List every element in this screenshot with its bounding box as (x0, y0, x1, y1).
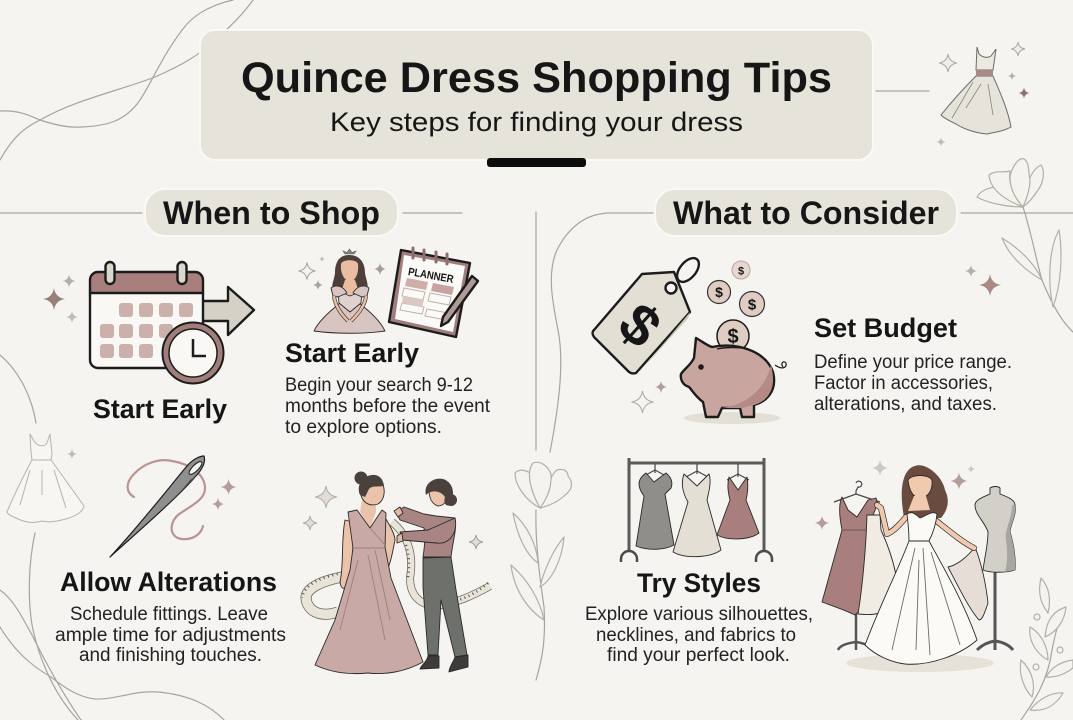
heading: allow alterations: Allow Alterations (60, 567, 277, 597)
panel: try styles (585, 458, 1015, 672)
text: start early description: to explore options. (285, 417, 442, 438)
icon: piggy bank: $ (727, 326, 739, 348)
illustration: bride (865, 465, 988, 664)
icon: clock (162, 322, 224, 384)
illustration: floor shadow (846, 654, 994, 672)
icon: thread (128, 460, 205, 539)
decorative branch: bottom right (1020, 578, 1073, 720)
text: allow alterations description: and finishing touches. (79, 645, 262, 666)
text: allow alterations description: ample time for adjustments (55, 625, 286, 646)
icon: falling coins: $ (748, 296, 757, 314)
icon: falling coins: $ (715, 284, 723, 300)
text: try styles description: Explore various silhouettes, (585, 604, 813, 625)
connector line: title to dress (876, 90, 929, 92)
sparkles: bride (815, 460, 975, 530)
text: allow alterations description (55, 604, 286, 666)
dress: cream (673, 474, 721, 557)
subtitle: Key steps for finding your dress (330, 107, 743, 137)
icon: dress, top right (941, 47, 1011, 134)
text: try styles description: find your perfect look. (607, 645, 790, 666)
text: set budget description: alterations, and taxes. (814, 394, 997, 415)
sparkles: top right flower (965, 265, 1001, 296)
text: start early description (285, 375, 491, 438)
section heading: When to Shop (145, 189, 398, 236)
illustration: hanging rose dress on stand (822, 481, 896, 650)
heading: start early: Start Early (93, 394, 227, 424)
text: set budget description (814, 352, 1012, 415)
title accent bar (487, 158, 586, 167)
illustration: mannequin (975, 486, 1015, 650)
section heading: What to Consider: What to Consider (673, 195, 939, 231)
heading: start early: Start Early (285, 338, 419, 368)
panel: start early calendar (43, 262, 254, 424)
icon: clothing rack (621, 458, 772, 562)
decorative dress outline: left (7, 434, 84, 522)
sparkles: top right dress (936, 42, 1030, 146)
text: set budget description: Factor in accessories, (814, 373, 993, 394)
text: start early description: months before the event (285, 396, 491, 417)
decorative flower: top right (977, 159, 1073, 332)
sparkles: calendar (43, 274, 78, 323)
text: start early description: Begin your search 9-12 (285, 375, 473, 396)
illustration: planner (389, 248, 478, 337)
title panel (200, 30, 873, 167)
heading: try styles: Try Styles (637, 568, 761, 598)
icon: calendar (90, 262, 203, 368)
section heading: What to Consider (655, 189, 957, 236)
section lines: when to shop (0, 212, 462, 214)
decorative swirls: top left (0, 0, 253, 160)
planner label: PLANNER (407, 266, 455, 286)
dress: grey (636, 473, 674, 549)
heading: set budget: Set Budget (814, 313, 957, 343)
sparkles: fitting (303, 486, 483, 549)
dollar sign: $ (606, 290, 673, 360)
panel: allow alterations (55, 456, 490, 674)
section line: what to consider (961, 212, 1073, 214)
text: allow alterations description: Schedule fittings. Leave (70, 604, 268, 625)
decorative flower: centre (511, 212, 653, 680)
panel: set budget (592, 254, 1012, 424)
icon: price tag (592, 254, 703, 374)
text: try styles description (585, 604, 813, 666)
text: try styles description: necklines, and fabrics to (596, 625, 796, 646)
icon: falling coins: $ (738, 266, 744, 278)
sparkles: budget (632, 381, 667, 413)
illustration: seamstress (394, 479, 468, 672)
icon: arrow (200, 287, 254, 335)
illustration: measuring tape (302, 522, 490, 614)
illustration: princess (314, 249, 385, 333)
icon: needle (110, 456, 205, 557)
sparkles: princess (298, 256, 386, 290)
sparkles: needle (212, 479, 236, 510)
dress: rose (717, 477, 759, 539)
section heading: When to Shop: When to Shop (163, 195, 380, 231)
sparkle: left dress (67, 449, 77, 459)
illustration: woman in gown (315, 472, 423, 674)
panel: start early planner (285, 248, 491, 438)
text: set budget description: Define your price range. (814, 352, 1012, 373)
decorative swirls: bottom left (0, 355, 226, 720)
title: Quince Dress Shopping Tips (241, 54, 832, 102)
icon: piggy bank (681, 320, 786, 424)
icon: falling coins (708, 261, 764, 316)
